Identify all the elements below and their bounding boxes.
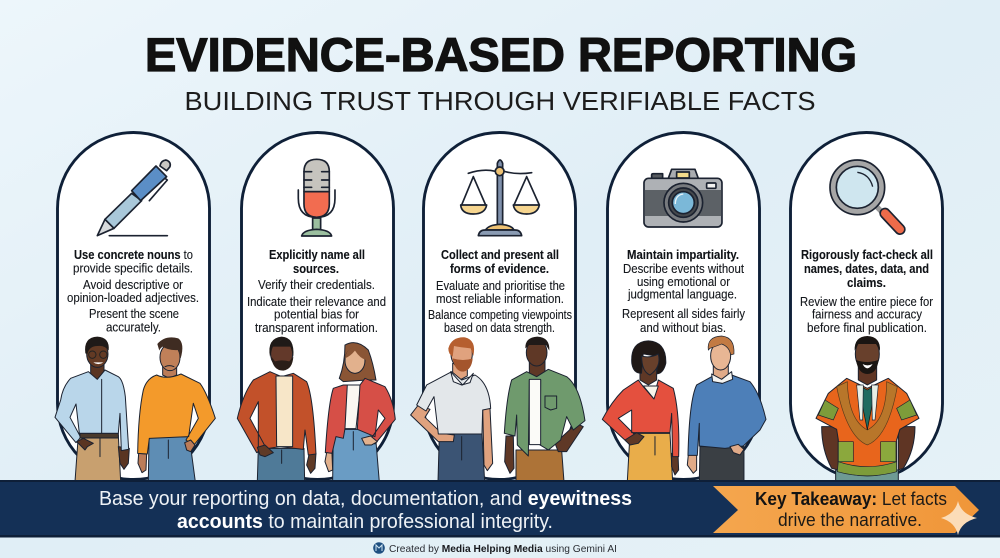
text: concrete nouns: opinion-loaded adjectives. (67, 291, 199, 305)
text: name sources (247, 248, 386, 335)
text: fact-check: Rigorously fact-check all (801, 248, 933, 262)
banner text (99, 487, 632, 533)
banner (0, 480, 1000, 538)
text: collect evidence: based on data strength. (444, 321, 555, 335)
text: concrete nouns: Avoid descriptive or (83, 278, 183, 292)
banner text: Base your reporting on data, documentation, and eyewitness (99, 487, 632, 510)
text: name sources: potential bias for (274, 308, 359, 322)
text: fact-check: Review the entire piece for (800, 295, 933, 309)
text: fact-check (800, 248, 933, 335)
person: man in white polo (411, 337, 493, 482)
text: collect evidence (428, 248, 572, 335)
text: impartiality: Maintain impartiality. (627, 248, 739, 262)
text: impartiality: judgmental language. (627, 288, 737, 302)
banner text: accounts to maintain professional integrity. (177, 510, 553, 533)
text: concrete nouns: provide specific details. (73, 262, 193, 276)
footer credit: Created by Media Helping Media using Gemini AI (389, 543, 617, 555)
text: collect evidence: Collect and present all (441, 248, 559, 262)
title: EVIDENCE-BASED REPORTING (145, 28, 857, 81)
takeaway text (755, 488, 947, 530)
text: fact-check: fairness and accuracy (812, 308, 923, 322)
person: man in dashiki (816, 336, 919, 482)
person: woman in red jacket (325, 343, 395, 482)
text: fact-check: names, dates, data, and (804, 262, 929, 276)
text: collect evidence: forms of evidence. (450, 262, 549, 276)
text: impartiality: Represent all sides fairly (622, 307, 746, 321)
person: man in rust jacket (237, 337, 316, 482)
takeaway text: drive the narrative. (778, 509, 922, 530)
panel: impartiality (602, 132, 766, 482)
text: concrete nouns: Present the scene (89, 307, 179, 321)
text: concrete nouns: Use concrete nouns to (74, 248, 193, 262)
key takeaway ribbon (713, 486, 979, 535)
text: name sources: Explicitly name all (269, 248, 365, 262)
person: man in orange sweater (138, 337, 215, 482)
text: name sources: transparent information. (255, 321, 378, 335)
text: impartiality: and without bias. (640, 321, 726, 335)
person: woman in red sweater (602, 341, 679, 482)
text: concrete nouns: accurately. (106, 320, 161, 334)
text: collect evidence: Evaluate and prioritise the (436, 279, 565, 293)
text: impartiality: using emotional or (637, 275, 730, 289)
person: man in blue sweater (687, 336, 766, 482)
icon: magnifying glass (830, 160, 900, 229)
text: fact-check: claims. (847, 276, 886, 290)
panel: name sources (237, 132, 395, 482)
subtitle: BUILDING TRUST THROUGH VERIFIABLE FACTS (184, 86, 816, 116)
text: name sources: sources. (293, 262, 339, 276)
icon: sparkle (941, 501, 977, 535)
text: collect evidence: Balance competing viewpoints (428, 308, 572, 322)
panel: concrete nouns (55, 132, 215, 482)
icon: microphone (298, 159, 335, 236)
text: name sources: Verify their credentials. (258, 278, 375, 292)
text: fact-check: before final publication. (807, 321, 927, 335)
icon: camera (644, 169, 722, 227)
panel: fact-check (790, 132, 942, 482)
panel: collect evidence (411, 132, 585, 482)
text: impartiality (622, 248, 746, 335)
icon: pen (97, 160, 170, 236)
icon: scales (461, 160, 539, 236)
text: concrete nouns (67, 248, 199, 334)
text: collect evidence: most reliable information. (436, 292, 564, 306)
takeaway text: Key Takeaway: Let facts (755, 488, 947, 509)
text: name sources: Indicate their relevance and (247, 295, 386, 309)
text: impartiality: Describe events without (623, 262, 744, 276)
person: man in green shirt (504, 337, 585, 482)
person: man in light blue shirt (55, 337, 129, 482)
